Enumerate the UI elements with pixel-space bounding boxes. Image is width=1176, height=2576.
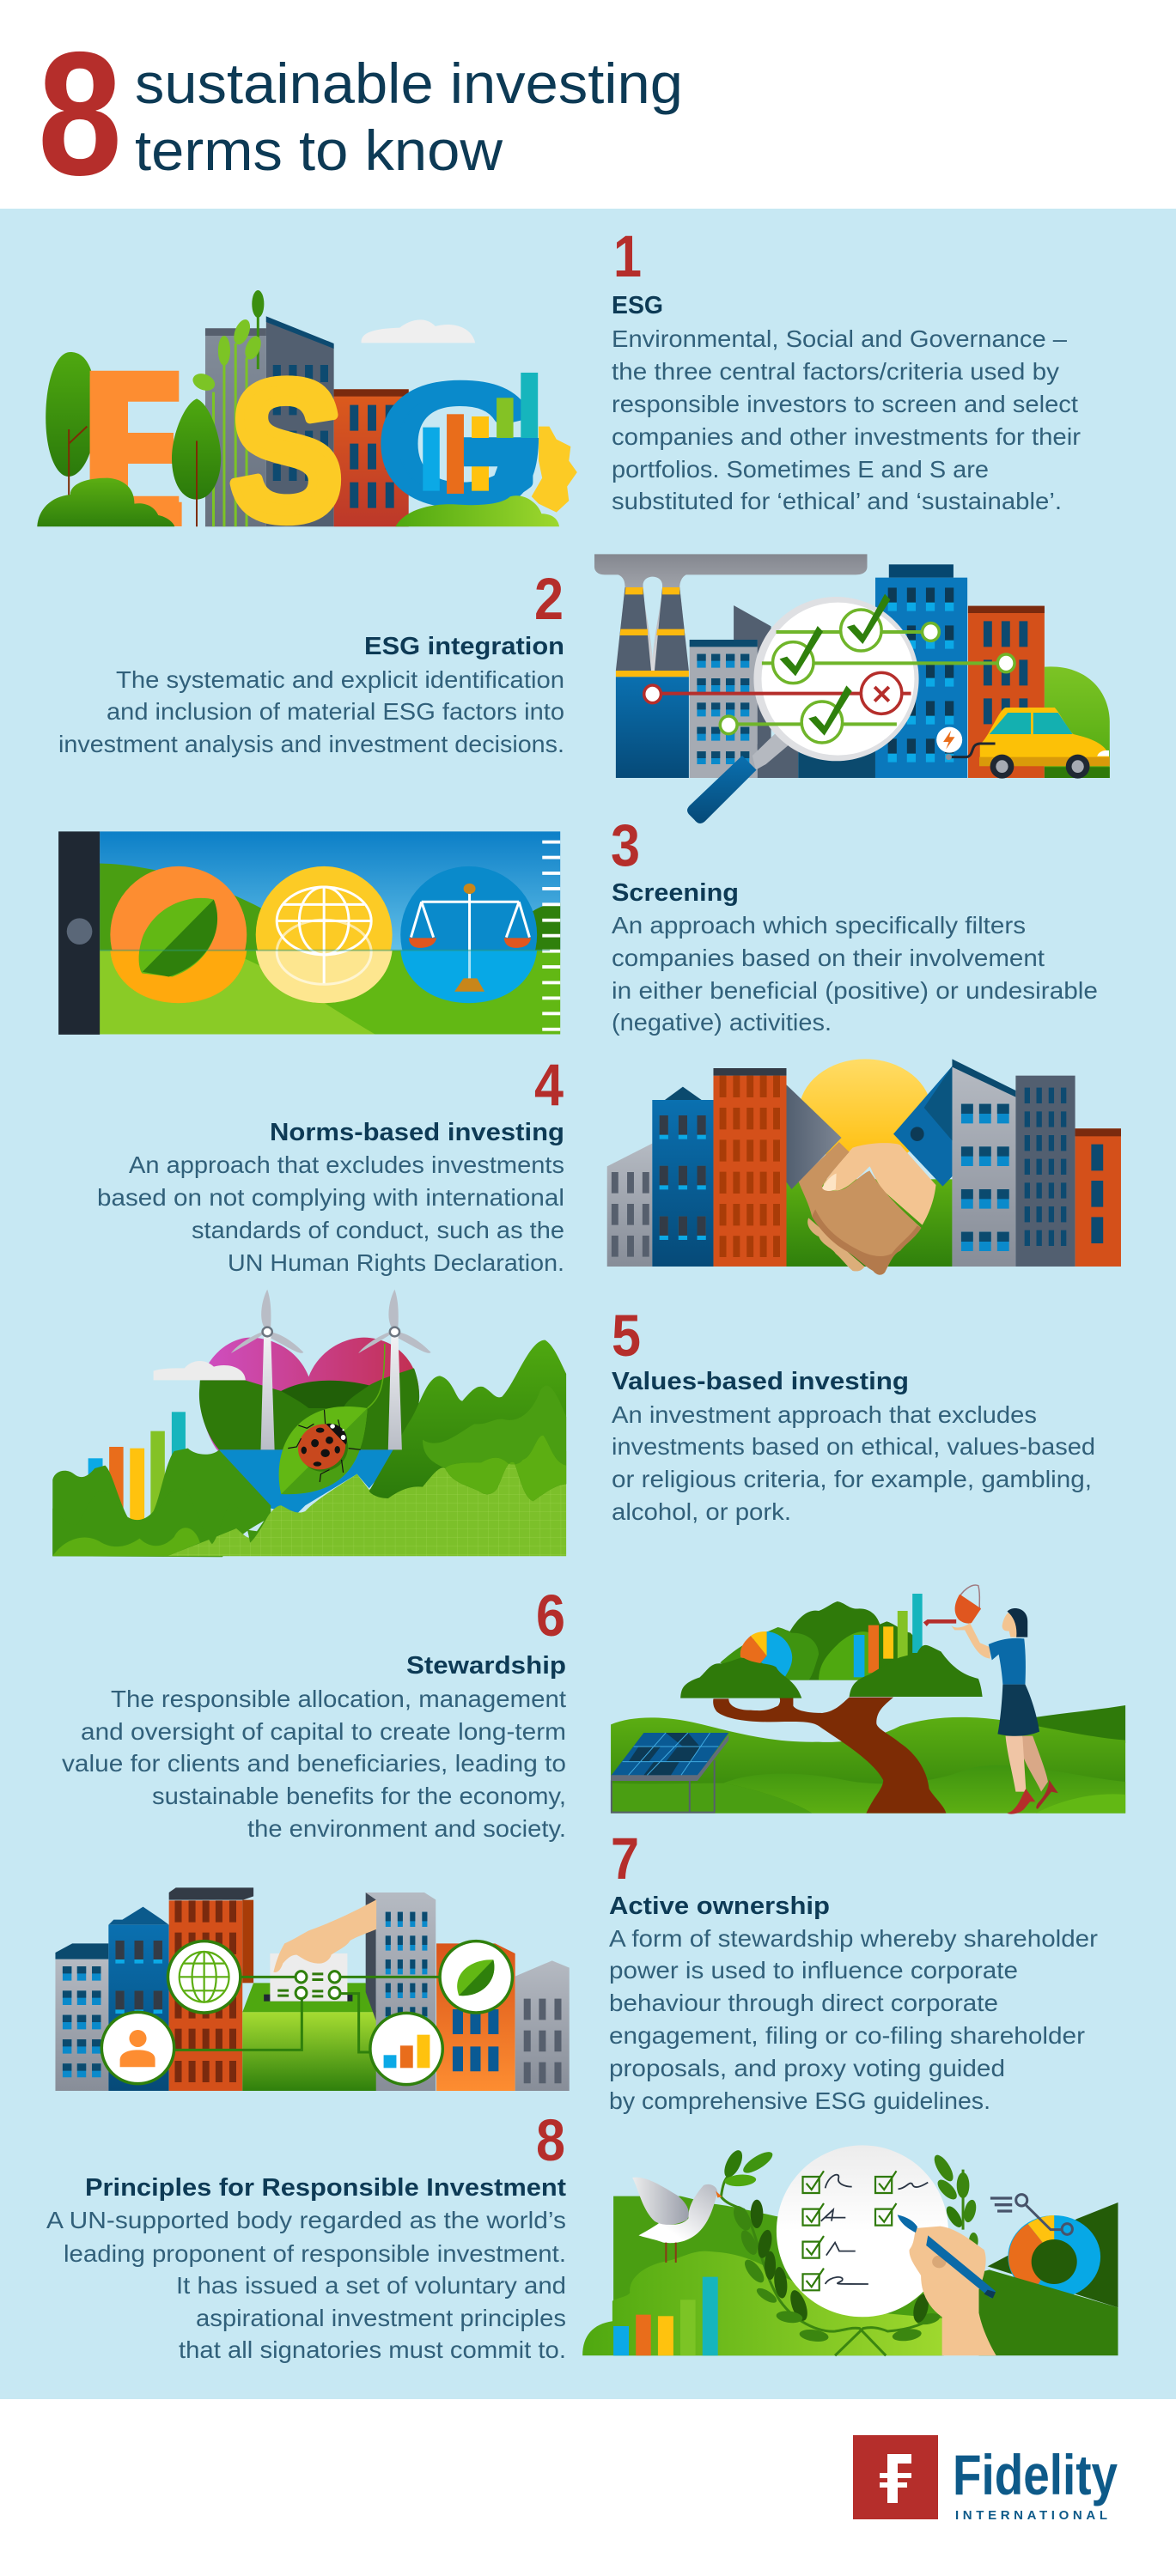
letter G: G bbox=[380, 354, 539, 534]
sun bbox=[799, 1059, 931, 1165]
icon: cloud bbox=[154, 1361, 246, 1380]
bar chart bbox=[854, 1594, 923, 1677]
icon: leaf with ladybird bbox=[279, 1344, 385, 1494]
title: terms to know bbox=[135, 118, 503, 182]
ground bbox=[786, 1179, 952, 1267]
body text bbox=[612, 325, 1081, 514]
body text bbox=[62, 1686, 566, 1842]
body text: and inclusion of material ESG factors into bbox=[107, 698, 564, 725]
body text bbox=[609, 1925, 1098, 2114]
icon: magnifying glass bbox=[687, 597, 919, 823]
illustration: screen with three lenses bbox=[58, 831, 560, 1035]
icon: solar panel bbox=[611, 1733, 728, 1813]
body text: standards of conduct, such as the bbox=[192, 1217, 564, 1243]
icon: signed charter bbox=[777, 2145, 948, 2317]
icon: cloud bbox=[362, 319, 475, 343]
body text: The systematic and explicit identification bbox=[116, 666, 564, 693]
heading: Principles for Responsible Investment bbox=[85, 2174, 566, 2202]
icon: wind turbines bbox=[231, 1290, 431, 1449]
body text: investments based on ethical, values-based bbox=[612, 1433, 1095, 1460]
number 1: 1 bbox=[613, 223, 642, 289]
panel: 6 Stewardship bbox=[62, 1583, 1125, 1842]
illustration: ESG letters with city bbox=[37, 290, 577, 573]
letter E: E bbox=[79, 329, 188, 573]
illustration: hand voting with linked icons bbox=[55, 1887, 570, 2091]
body text: power is used to influence corporate bbox=[609, 1957, 1018, 1984]
icon: heart bbox=[199, 1338, 419, 1514]
panel: 5 Values-based investing bbox=[52, 1290, 1095, 1557]
panel: 8 Principles for Responsible Investment bbox=[46, 2107, 1118, 2363]
body text bbox=[46, 2207, 566, 2363]
bushes bbox=[37, 478, 559, 526]
illustration: handshake in city bbox=[607, 1059, 1121, 1275]
body text: and oversight of capital to create long-term bbox=[81, 1718, 566, 1745]
body text: An approach which specifically filters bbox=[612, 912, 1026, 939]
body text: A form of stewardship whereby shareholder bbox=[609, 1925, 1098, 1952]
buildings bbox=[690, 564, 1110, 778]
body text bbox=[612, 1401, 1095, 1525]
panel: 4 Norms-based investing bbox=[97, 1052, 1121, 1276]
tree left bbox=[46, 352, 96, 495]
number 6: 6 bbox=[536, 1583, 565, 1649]
tree canopy back bbox=[720, 1601, 928, 1680]
icon: yellow electric car bbox=[936, 708, 1110, 779]
bar chart bbox=[613, 2277, 718, 2355]
wordmark: Fidelity bbox=[953, 2443, 1118, 2506]
icon: person circle bbox=[101, 2012, 174, 2084]
body text: by comprehensive ESG guidelines. bbox=[609, 2087, 990, 2114]
body text: that all signatories must commit to. bbox=[179, 2336, 566, 2363]
heading: Norms-based investing bbox=[270, 1119, 564, 1146]
buildings behind letters bbox=[189, 290, 409, 526]
illustration: dove, signed charter and donut chart bbox=[582, 2145, 1118, 2355]
icon: pointing hand bbox=[273, 1899, 376, 1972]
ballot paper bbox=[264, 1953, 352, 2002]
icon: globe circle bbox=[168, 1941, 241, 2013]
body text: Environmental, Social and Governance – bbox=[612, 325, 1068, 352]
number 3: 3 bbox=[611, 812, 640, 878]
body text: engagement, filing or co-filing shareholder bbox=[609, 2022, 1085, 2049]
icon: donut chart bbox=[1008, 2215, 1100, 2299]
gear bbox=[532, 427, 577, 513]
body text: responsible investors to screen and select bbox=[612, 391, 1078, 417]
body text: The responsible allocation, management bbox=[111, 1686, 566, 1712]
tree centre bbox=[172, 398, 221, 526]
body text bbox=[58, 666, 564, 757]
body text: It has issued a set of voluntary and bbox=[176, 2272, 566, 2299]
body text: or religious criteria, for example, gambling, bbox=[612, 1466, 1092, 1492]
body text: leading proponent of responsible investment. bbox=[64, 2240, 566, 2267]
icon: leaf lens bbox=[110, 866, 247, 1003]
number 5: 5 bbox=[612, 1303, 641, 1369]
body text: the environment and society. bbox=[247, 1815, 566, 1842]
heading: Values-based investing bbox=[612, 1368, 909, 1395]
body text: substituted for ‘ethical’ and ‘sustainable’. bbox=[612, 488, 1062, 514]
heading: Active ownership bbox=[609, 1893, 830, 1920]
connector lines and check marks bbox=[644, 594, 1015, 743]
tree canopy front bbox=[680, 1645, 983, 1698]
big number 8: 8 bbox=[38, 15, 122, 212]
illustration: woman watering tree bbox=[611, 1585, 1125, 1814]
icon: pie chart bbox=[740, 1631, 792, 1677]
bar chart inside G bbox=[423, 373, 539, 501]
body text: companies based on their involvement bbox=[612, 945, 1045, 971]
factory bbox=[594, 554, 867, 778]
header bbox=[38, 15, 683, 212]
lens horizon line bbox=[100, 950, 550, 951]
logo: Fidelity International bbox=[853, 2435, 1118, 2523]
illustration: heart, turbines and ladybird bbox=[52, 1290, 566, 1557]
body text: investment analysis and investment decisions. bbox=[58, 731, 564, 757]
icon: dove with olive branch bbox=[632, 2178, 722, 2263]
icon: bar chart circle bbox=[370, 2013, 442, 2085]
body text bbox=[612, 912, 1098, 1036]
heading: Stewardship bbox=[406, 1652, 566, 1680]
icon: globe lens bbox=[256, 866, 393, 1003]
connector lines bbox=[174, 1971, 440, 2052]
landscape bbox=[100, 831, 560, 1034]
sub wordmark: INTERNATIONAL bbox=[955, 2508, 1107, 2523]
panel: 2 ESG integration bbox=[58, 554, 1110, 823]
body text: proposals, and proxy voting guided bbox=[609, 2055, 1005, 2081]
number 8: 8 bbox=[536, 2107, 565, 2173]
heading: Screening bbox=[612, 879, 739, 907]
body text: portfolios. Sometimes E and S are bbox=[612, 456, 989, 483]
body text: companies and other investments for their bbox=[612, 423, 1081, 450]
number 4: 4 bbox=[534, 1052, 564, 1118]
hill front bbox=[978, 2269, 1118, 2355]
bar chart bbox=[88, 1412, 186, 1522]
body text: value for clients and beneficiaries, leading to bbox=[62, 1750, 566, 1777]
body text: sustainable benefits for the economy, bbox=[152, 1783, 566, 1809]
body text: alcohol, or pork. bbox=[612, 1498, 791, 1525]
number 7: 7 bbox=[611, 1826, 639, 1892]
panel: 7 Active ownership bbox=[55, 1826, 1098, 2114]
buildings right bbox=[952, 1059, 1121, 1267]
body text bbox=[97, 1151, 564, 1276]
heading: ESG integration bbox=[364, 633, 564, 660]
buildings bbox=[55, 1887, 570, 2091]
body text: based on not complying with international bbox=[97, 1184, 564, 1211]
device edge bbox=[58, 831, 100, 1035]
woman with watering can bbox=[923, 1585, 1058, 1814]
body text: An investment approach that excludes bbox=[612, 1401, 1037, 1428]
body text: behaviour through direct corporate bbox=[609, 1990, 998, 2016]
panel: 3 Screening bbox=[58, 812, 1098, 1036]
body text: aspirational investment principles bbox=[196, 2305, 566, 2331]
buildings left bbox=[607, 1068, 786, 1267]
illustration: magnifier over factory and city bbox=[594, 554, 1110, 823]
handshake bbox=[786, 1066, 952, 1275]
hills bbox=[611, 1705, 1125, 1814]
number 2: 2 bbox=[534, 566, 564, 632]
title: sustainable investing bbox=[135, 52, 683, 115]
icon: scales lens bbox=[400, 866, 537, 1003]
body text: An approach that excludes investments bbox=[129, 1151, 564, 1178]
tree trunk bbox=[713, 1698, 946, 1814]
body text: A UN-supported body regarded as the world’s bbox=[46, 2207, 566, 2233]
letter S: S bbox=[229, 339, 344, 561]
icon: leaf circle bbox=[440, 1941, 512, 2013]
body text: (negative) activities. bbox=[612, 1009, 832, 1036]
ruler ticks bbox=[542, 841, 560, 1031]
body text: UN Human Rights Declaration. bbox=[228, 1249, 564, 1276]
heading: ESG bbox=[612, 292, 663, 319]
body text: in either beneficial (positive) or undesirable bbox=[612, 977, 1098, 1004]
panel: 1 ESG bbox=[37, 223, 1081, 573]
icon: key diagram bbox=[990, 2195, 1072, 2234]
body text: the three central factors/criteria used by bbox=[612, 358, 1059, 385]
green hills bbox=[52, 1340, 566, 1557]
hills bbox=[582, 2196, 1118, 2355]
icon: red F square bbox=[853, 2435, 938, 2519]
title bbox=[135, 52, 683, 182]
icon: hand holding pen bbox=[898, 2215, 996, 2355]
laurel wreath bbox=[721, 2148, 978, 2355]
